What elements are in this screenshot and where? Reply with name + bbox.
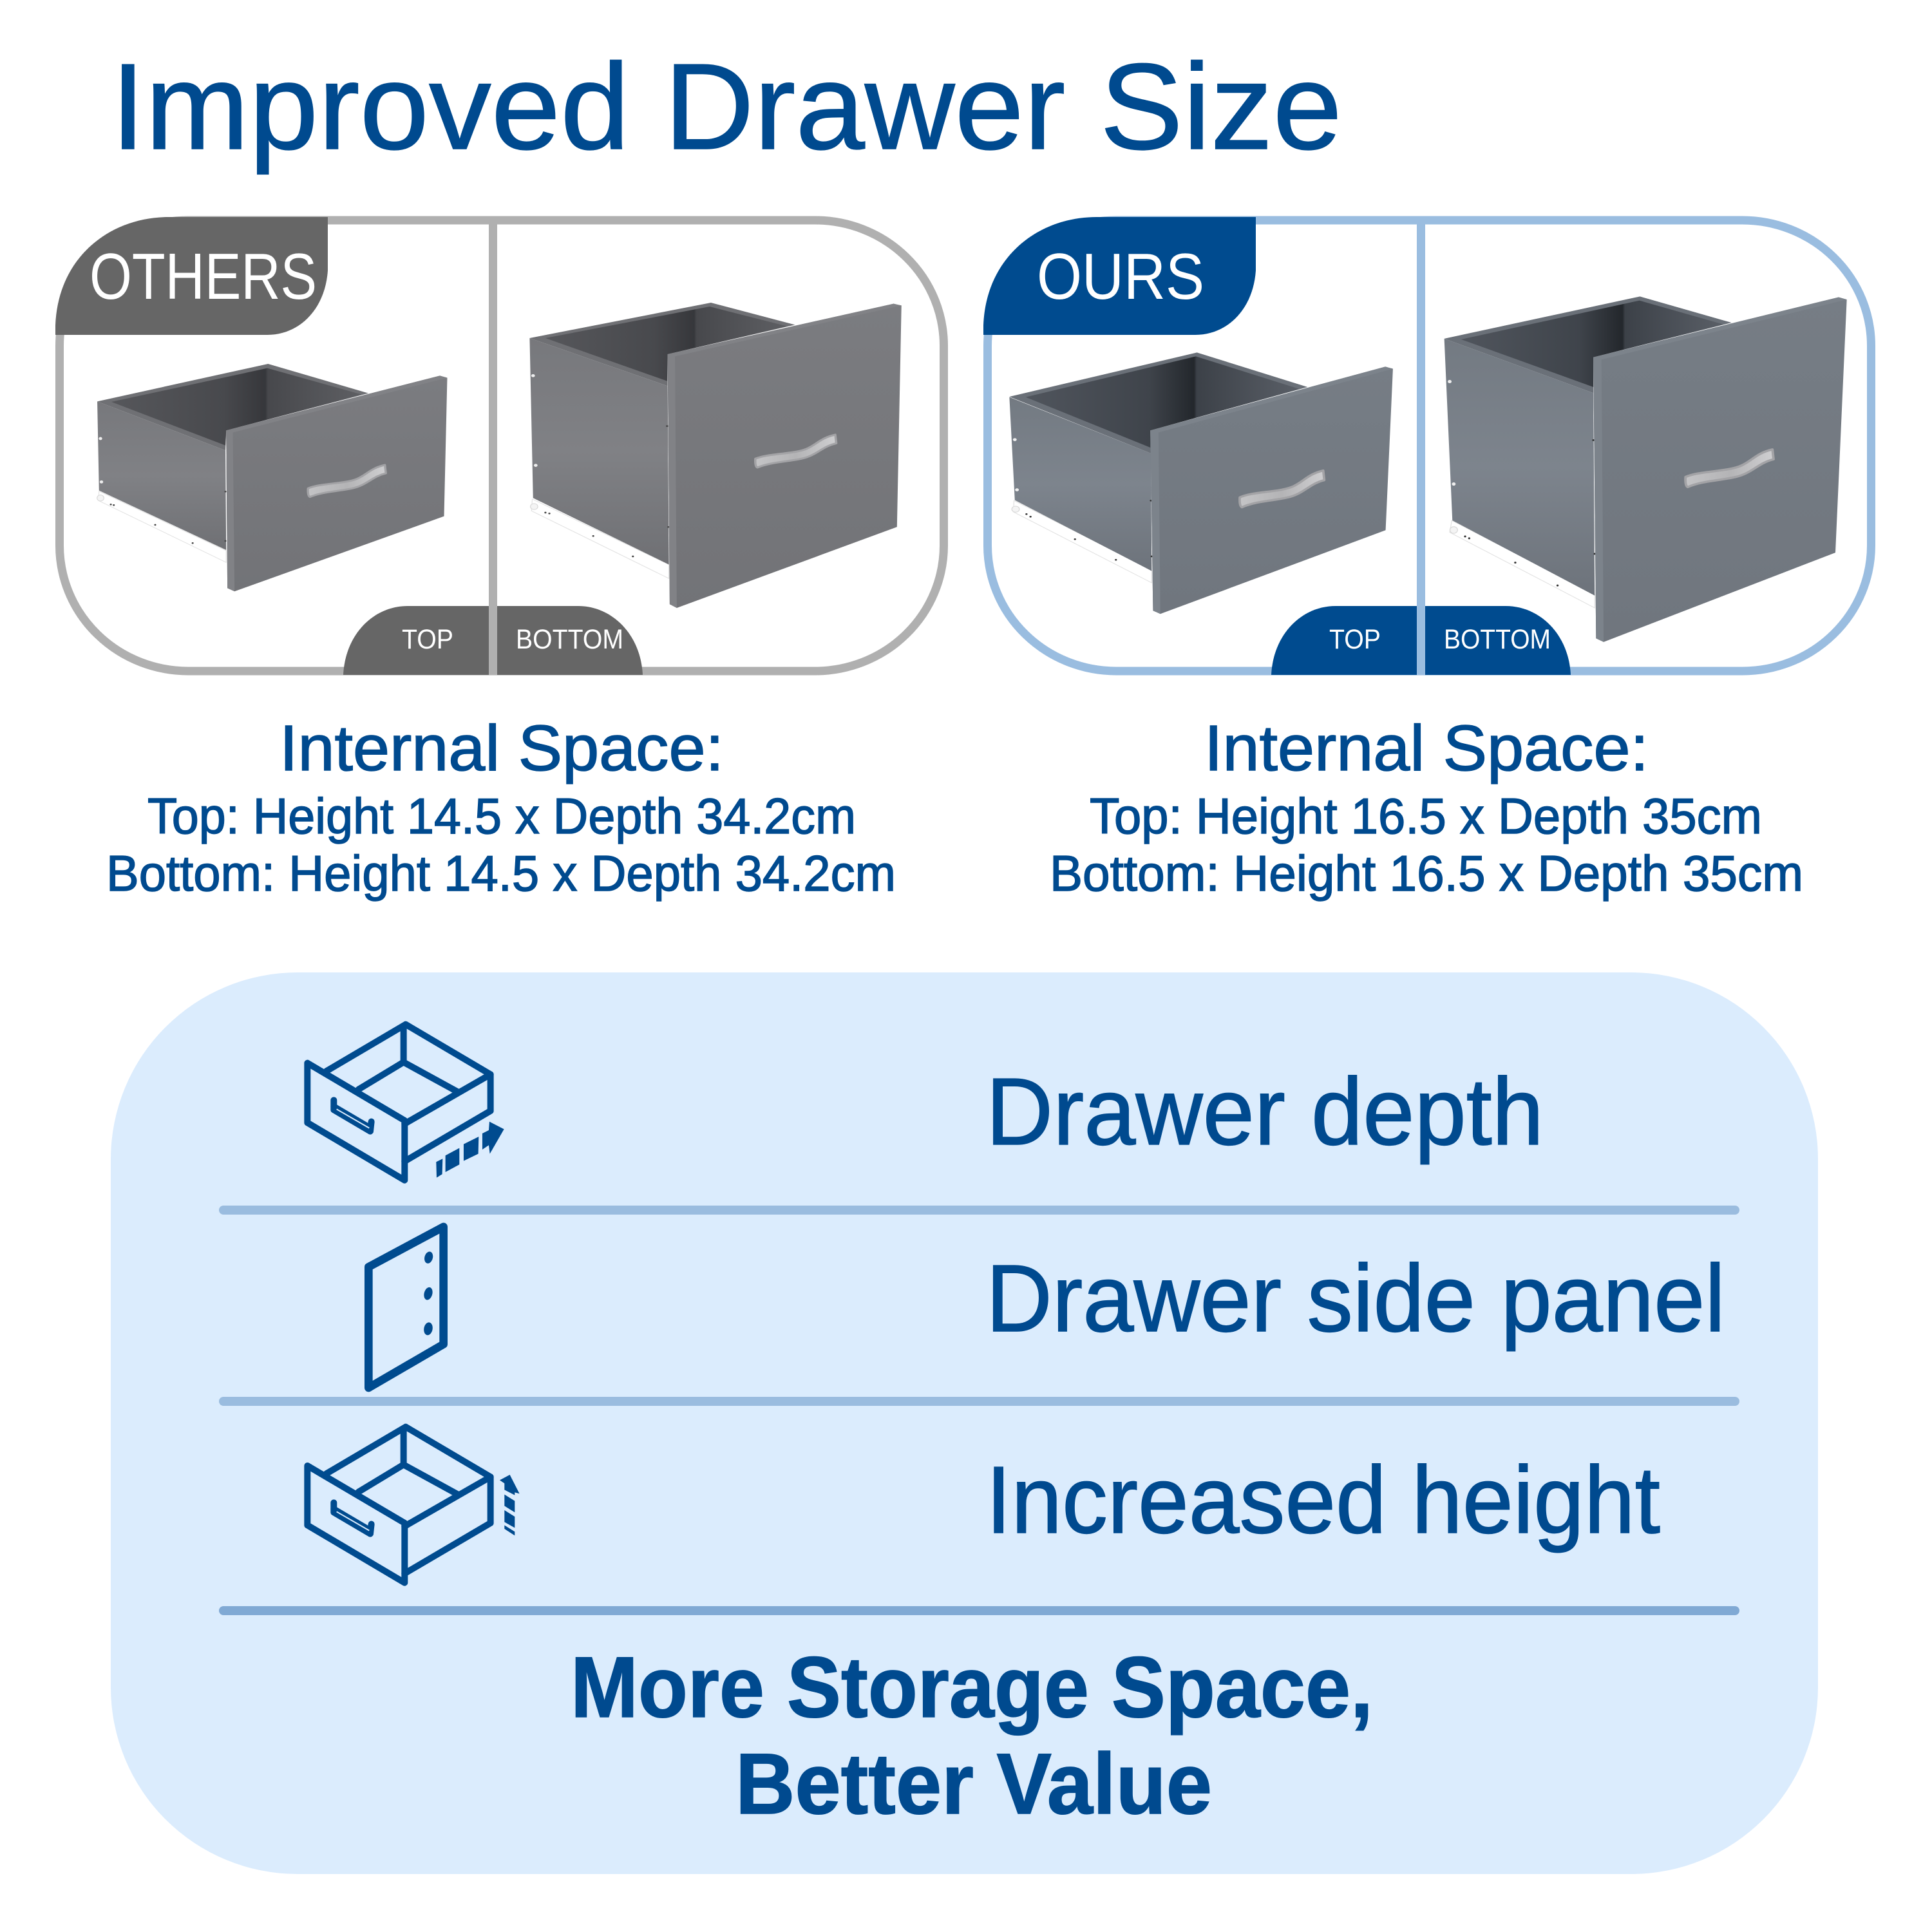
panel outline: others: [59, 220, 944, 671]
label: drawer depth: Drawer depth: [986, 1059, 1544, 1165]
text block: ours internal space: Internal Space:: [1204, 712, 1649, 784]
tab: bottom (others): [497, 606, 643, 675]
tab: top (others): [343, 606, 489, 675]
tab: others: [55, 217, 328, 335]
tab: top (others): TOP: [402, 624, 453, 655]
tab: others: OTHERS: [90, 241, 317, 313]
panel outline: ours: [988, 220, 1871, 671]
drawer image: others top: [97, 364, 447, 591]
closing statement: More Storage Space,: [571, 1640, 1373, 1736]
title: Improved Drawer Size: [111, 39, 1342, 175]
label: drawer side panel: Drawer side panel: [986, 1245, 1725, 1352]
divider: ours: [1417, 216, 1425, 675]
closing statement: Better Value: [735, 1736, 1212, 1832]
panel: benefits: [111, 972, 1818, 1874]
tab: top (ours): [1271, 606, 1417, 675]
icon: drawer side panel: [368, 1227, 444, 1388]
tab: bottom (others): BOTTOM: [516, 624, 623, 655]
drawer image: ours bottom: [1444, 296, 1847, 642]
text block: others internal space: Bottom: Height 14.5 x Depth 34.2cm: [106, 845, 896, 902]
panel: others comparison: [55, 216, 944, 675]
drawer image: ours top: [1009, 352, 1393, 614]
label: increased height: Increased height: [986, 1447, 1660, 1553]
tab: ours: OURS: [1037, 241, 1204, 313]
tab: ours: [983, 217, 1256, 335]
divider: others: [489, 216, 497, 675]
closing statement: [571, 1640, 1373, 1832]
text block: others internal space: [106, 712, 896, 902]
panel: ours comparison: [983, 216, 1871, 675]
tab: bottom (ours): BOTTOM: [1444, 624, 1551, 655]
benefits background: [111, 972, 1818, 1874]
icon: increased height: [307, 1427, 520, 1583]
tab: top (ours): TOP: [1329, 624, 1381, 655]
icon: drawer depth: [307, 1025, 504, 1180]
text block: ours internal space: [1050, 712, 1803, 902]
text block: ours internal space: Bottom: Height 16.5 x Depth 35cm: [1050, 845, 1803, 902]
drawer image: others bottom: [529, 303, 902, 608]
tab: bottom (ours): [1425, 606, 1571, 675]
text block: others internal space: Top: Height 14.5 x Depth 34.2cm: [147, 788, 856, 844]
text block: others internal space: Internal Space:: [279, 712, 724, 784]
text block: ours internal space: Top: Height 16.5 x Depth 35cm: [1090, 788, 1762, 844]
